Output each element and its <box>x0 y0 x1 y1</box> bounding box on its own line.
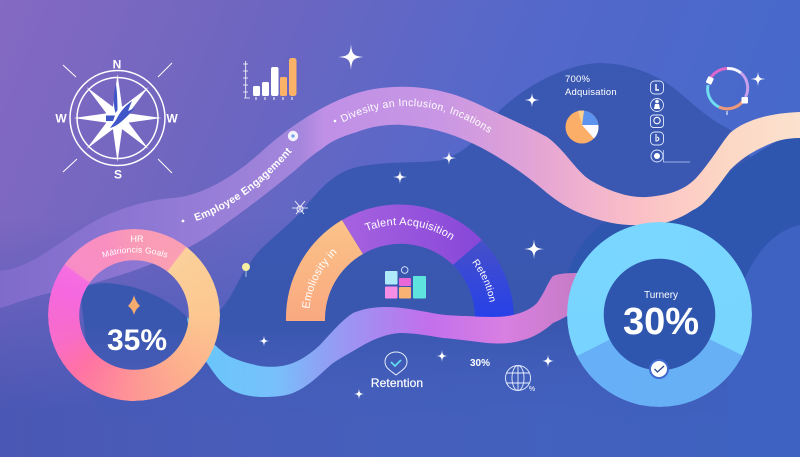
icon: compass: S <box>114 168 122 182</box>
icon: globe: % <box>529 386 535 393</box>
label: employee engagement: Employee Engagement <box>194 148 292 221</box>
dark wave region <box>80 63 800 457</box>
ribbon: lower wave <box>187 273 585 397</box>
label: hr metrics goals: HR <box>130 234 144 244</box>
icon: compass: W <box>55 112 67 126</box>
donut: turnover ring <box>567 222 752 407</box>
label: 700 percent acquisition <box>565 74 617 98</box>
icon: compass: N <box>113 58 121 72</box>
pie chart <box>566 110 598 144</box>
dark field right of turnover ring <box>620 130 800 320</box>
icon list <box>650 81 690 162</box>
panel: arch segment blue <box>453 240 514 321</box>
label: hr metrics goals: Mátrioncis Goals <box>102 246 168 258</box>
icon: compass <box>55 58 178 182</box>
lighter blob at right <box>727 225 800 457</box>
label: 700 percent acquisition: Adquisation <box>565 87 617 98</box>
icon: retention shield check <box>385 352 407 375</box>
label: pin <box>242 263 250 277</box>
value: 35 percent: 35% <box>107 324 167 357</box>
icon: color blocks <box>385 267 426 298</box>
icon: check badge <box>649 359 669 379</box>
icon: orange star <box>128 295 140 315</box>
sparkles <box>258 44 766 400</box>
value: 30 percent: 30% <box>623 301 699 343</box>
ribbon: employee engagement and diversity <box>0 87 800 308</box>
panel: arch segment purple <box>342 205 482 265</box>
icon: small network <box>292 201 308 214</box>
label: hr metrics goals <box>102 234 168 258</box>
label: diversity and inclusion: Divesity an Inclusion, Incations <box>340 98 492 132</box>
donut: HR metrics ring <box>48 229 220 401</box>
label: retention: Retention <box>371 376 423 390</box>
label: retention on arch: Retention <box>472 258 495 302</box>
bar chart <box>243 58 296 100</box>
panel: arch segment orange <box>286 220 363 321</box>
label: talent acquisition: Talent Acquisition <box>364 217 454 240</box>
dark halo behind turnover ring <box>564 205 754 395</box>
value: small 30 percent: 30% <box>470 358 490 369</box>
label: turnover: Turnery <box>644 290 678 301</box>
label: 700 percent acquisition: 700% <box>565 74 590 85</box>
icon: globe <box>506 366 535 393</box>
icon: segmented ring <box>706 68 748 115</box>
label: arch left text: Emoliosity in <box>302 250 337 308</box>
icon: compass: W <box>166 112 178 126</box>
